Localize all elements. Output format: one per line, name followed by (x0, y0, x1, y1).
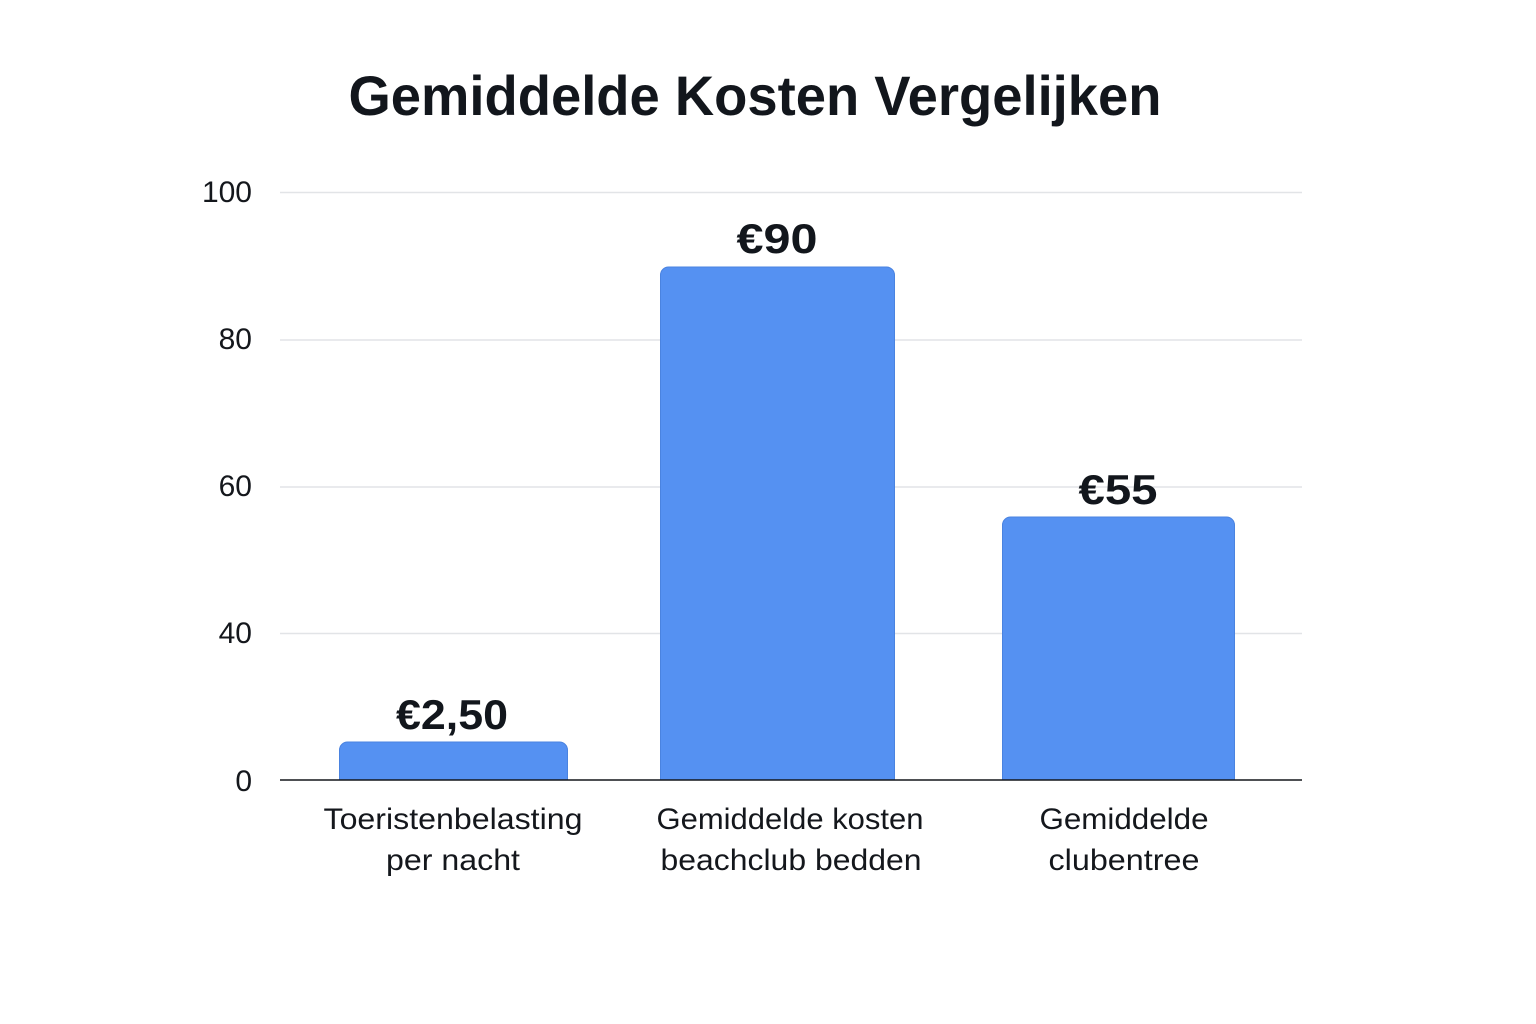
category labels: clubentree (1048, 844, 1200, 877)
bar chart (202, 176, 1302, 877)
y axis labels: 100 (202, 176, 252, 209)
y axis labels: 60 (219, 470, 252, 503)
category labels (324, 803, 1208, 877)
category labels: Toeristenbelasting (324, 803, 582, 836)
category labels: per nacht (386, 844, 521, 877)
y axis labels: 80 (219, 323, 252, 356)
value labels: €90 (736, 215, 818, 262)
title: Gemiddelde Kosten Vergelijken (348, 64, 1162, 127)
bar: beachclub bedden (660, 267, 894, 780)
category labels: Gemiddelde (1040, 803, 1208, 836)
value labels: €2,50 (396, 691, 508, 738)
value labels (396, 215, 1158, 738)
category labels: Gemiddelde kosten (656, 803, 924, 836)
bar: Toeristenbelasting (340, 742, 568, 780)
y axis labels: 0 (235, 765, 252, 798)
bar: clubentree (1002, 517, 1234, 780)
category labels: beachclub bedden (660, 844, 922, 877)
y axis labels (202, 176, 252, 798)
value labels: €55 (1078, 466, 1158, 513)
y axis labels: 40 (219, 617, 252, 650)
